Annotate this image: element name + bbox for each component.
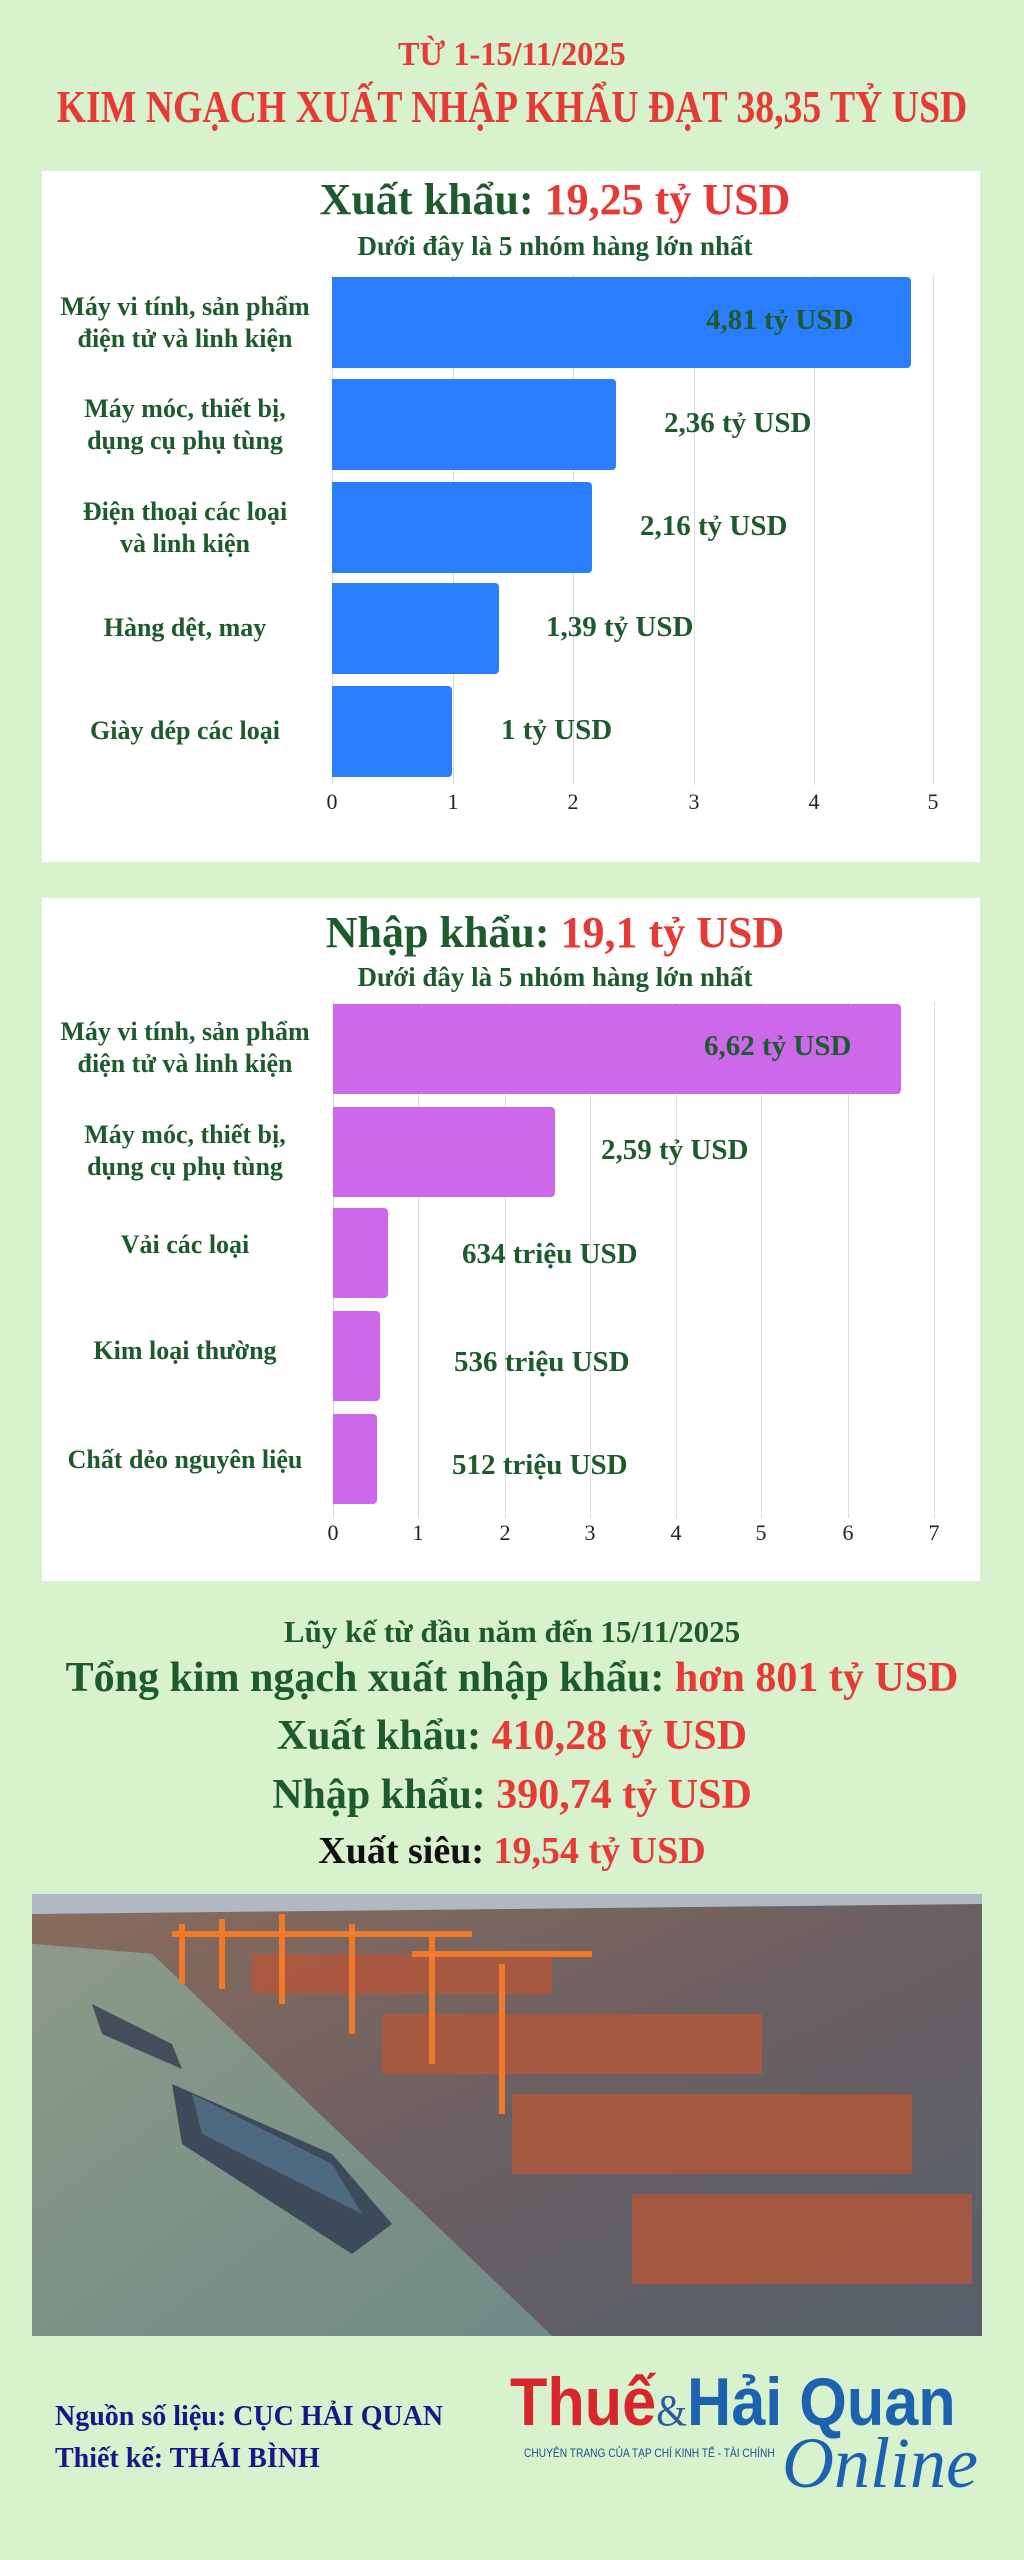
heading: export: Xuất khẩu: 19,25 tỷ USD xyxy=(320,175,790,224)
summary text block: Xuất khẩu: 410,28 tỷ USD xyxy=(277,1713,747,1759)
footer: credits xyxy=(55,2400,443,2474)
axis ticks: 0 xyxy=(326,789,338,814)
summary text block: Lũy kế từ đầu năm đến 15/11/2025 xyxy=(284,1614,740,1649)
label: metals: Kim loại thường xyxy=(93,1336,277,1365)
axis ticks: 7 xyxy=(928,1520,940,1545)
axis ticks: 3 xyxy=(688,789,700,814)
bar: plastics xyxy=(333,1414,377,1504)
label: computers: Máy vi tính, sản phẩm xyxy=(60,1017,310,1046)
value: machinery: 2,36 tỷ USD xyxy=(664,407,811,439)
axis ticks: 5 xyxy=(756,1520,766,1545)
value: footwear: 1 tỷ USD xyxy=(501,714,612,746)
label: machinery xyxy=(84,1120,286,1181)
value: fabric: 634 triệu USD xyxy=(462,1238,638,1270)
bar: phones xyxy=(332,482,592,573)
label: plastics: Chất dẻo nguyên liệu xyxy=(68,1445,302,1474)
panel: export chart xyxy=(42,171,980,862)
value: computers: 6,62 tỷ USD xyxy=(704,1030,851,1062)
value: computers: 4,81 tỷ USD xyxy=(706,304,853,336)
bar: metals xyxy=(333,1311,380,1401)
bar: textiles xyxy=(332,583,499,674)
title: TỪ 1-15/11/2025 xyxy=(398,36,626,73)
value: phones: 2,16 tỷ USD xyxy=(640,510,787,542)
label: machinery xyxy=(84,394,286,455)
summary text block: Xuất siêu: 19,54 tỷ USD xyxy=(318,1830,706,1872)
logo: Thuế & Hải Quan Online xyxy=(510,2364,978,2503)
axis ticks: 1 xyxy=(448,789,458,814)
label: machinery: dụng cụ phụ tùng xyxy=(87,1152,283,1181)
value: metals: 536 triệu USD xyxy=(454,1346,630,1378)
axis ticks: 1 xyxy=(412,1520,424,1545)
subtitle: Dưới đây là 5 nhóm hàng lớn nhất xyxy=(358,231,752,261)
bar: fabric xyxy=(333,1208,388,1298)
axis ticks xyxy=(328,1520,940,1545)
label: phones: và linh kiện xyxy=(120,529,250,558)
label: phones: Điện thoại các loại xyxy=(83,497,287,526)
heading: import: Nhập khẩu: 19,1 tỷ USD xyxy=(326,908,784,957)
value: plastics: 512 triệu USD xyxy=(452,1449,628,1481)
axis ticks: 6 xyxy=(842,1520,854,1545)
panel: import chart xyxy=(42,898,980,1581)
label: machinery: Máy móc, thiết bị, xyxy=(84,1120,286,1149)
bar: computers xyxy=(333,1004,901,1094)
subtitle: Dưới đây là 5 nhóm hàng lớn nhất xyxy=(358,962,752,992)
photo: port xyxy=(32,1894,982,2336)
label: machinery: dụng cụ phụ tùng xyxy=(87,426,283,455)
label: machinery: Máy móc, thiết bị, xyxy=(84,394,286,423)
axis ticks: 3 xyxy=(584,1520,596,1545)
summary text block: Nhập khẩu: 390,74 tỷ USD xyxy=(272,1772,752,1818)
value: machinery: 2,59 tỷ USD xyxy=(601,1134,748,1166)
axis ticks: 4 xyxy=(670,1520,682,1545)
axis ticks: 4 xyxy=(808,789,820,814)
axis ticks: 5 xyxy=(928,789,938,814)
label: footwear: Giày dép các loại xyxy=(90,716,280,745)
value: textiles: 1,39 tỷ USD xyxy=(546,611,693,643)
label: fabric: Vải các loại xyxy=(121,1230,249,1259)
label: computers: điện tử và linh kiện xyxy=(77,1049,292,1078)
summary text block: Tổng kim ngạch xuất nhập khẩu: hơn 801 tỷ USD xyxy=(66,1655,958,1701)
logo: Thuế & Hải Quan Online: Thuế&Hải Quan xyxy=(510,2364,956,2440)
footer: credits: Nguồn số liệu: CỤC HẢI QUAN xyxy=(55,2401,443,2432)
label: phones xyxy=(83,497,287,558)
logo: Thuế & Hải Quan Online: CHUYÊN TRANG CỦA TẠP CHÍ KINH TẾ - TÀI CHÍNH xyxy=(524,2446,775,2460)
label: computers xyxy=(60,292,310,353)
logo: Thuế & Hải Quan Online: Online xyxy=(782,2423,978,2503)
title: KIM NGẠCH XUẤT NHẬP KHẨU ĐẠT 38,35 TỶ USD xyxy=(57,81,967,132)
bar: machinery xyxy=(332,379,616,470)
label: textiles: Hàng dệt, may xyxy=(104,613,266,642)
axis ticks: 2 xyxy=(500,1520,510,1545)
title xyxy=(57,36,967,132)
bar: machinery xyxy=(333,1107,555,1197)
axis ticks: 2 xyxy=(568,789,578,814)
label: computers xyxy=(60,1017,310,1078)
footer: credits: Thiết kế: THÁI BÌNH xyxy=(55,2443,320,2474)
axis ticks xyxy=(326,789,938,814)
label: computers: điện tử và linh kiện xyxy=(77,324,292,353)
bar: computers xyxy=(332,277,911,368)
label: computers: Máy vi tính, sản phẩm xyxy=(60,292,310,321)
axis ticks: 0 xyxy=(328,1520,338,1545)
bar: footwear xyxy=(332,686,452,777)
summary text block xyxy=(66,1614,958,1872)
